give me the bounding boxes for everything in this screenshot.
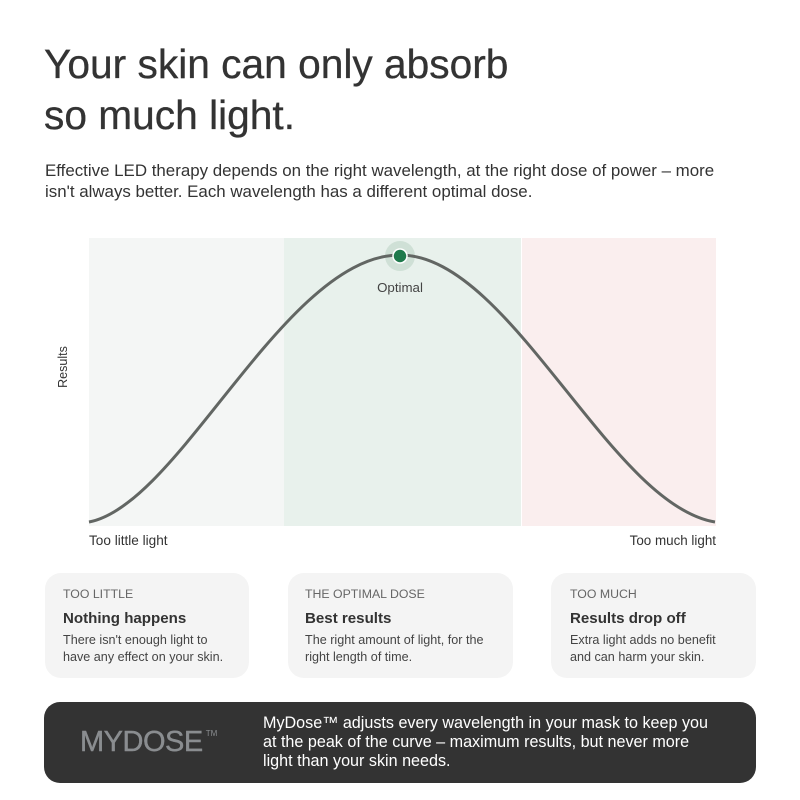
- mydose logo: MYDOSE TM: [80, 726, 217, 758]
- card: too little: There isn't enough light to: [63, 633, 208, 647]
- card: too little: Nothing happens: [63, 610, 186, 627]
- card: the optimal dose: THE OPTIMAL DOSE: [305, 587, 425, 601]
- title: [44, 41, 508, 138]
- mydose banner: [44, 702, 756, 783]
- card: the optimal dose: Best results: [305, 610, 391, 627]
- zone: too little light: [89, 238, 284, 526]
- title: Your skin can only absorb: [44, 41, 508, 87]
- curve: [89, 255, 715, 522]
- mydose description: MyDose™ adjusts every wavelength in your mask to keep you: [263, 714, 708, 732]
- title: so much light.: [44, 92, 295, 138]
- bell curve chart: [56, 238, 716, 548]
- card: too little: have any effect on your skin.: [63, 650, 223, 664]
- card: too little: TOO LITTLE: [63, 587, 133, 601]
- card: too much: TOO MUCH: [570, 587, 637, 601]
- x axis label right: Too much light: [630, 533, 716, 548]
- y axis label: Results: [56, 346, 70, 388]
- zone: too much light: [522, 238, 716, 526]
- card: the optimal dose: The right amount of light, for the: [305, 633, 484, 647]
- mydose description: [263, 714, 708, 770]
- optimal label: Optimal: [377, 280, 423, 295]
- card: too much: Results drop off: [570, 610, 686, 627]
- mydose description: light than your skin needs.: [263, 752, 451, 770]
- optimal marker: [393, 249, 407, 263]
- card: too much: and can harm your skin.: [570, 650, 704, 664]
- card: too much: Extra light adds no benefit: [570, 633, 716, 647]
- intro text: Effective LED therapy depends on the right wavelength, at the right dose of power – more: [45, 161, 714, 180]
- intro text: isn't always better. Each wavelength has a different optimal dose.: [45, 182, 532, 201]
- marker halo: [385, 241, 415, 271]
- zone: optimal dose: [284, 238, 521, 526]
- intro text: [45, 161, 714, 201]
- card: the optimal dose: [288, 573, 513, 678]
- card: too much: [551, 573, 756, 678]
- mydose description: at the peak of the curve – maximum results, but never more: [263, 733, 689, 751]
- card: too little: [45, 573, 249, 678]
- card: the optimal dose: right length of time.: [305, 650, 412, 664]
- x axis label left: Too little light: [89, 533, 168, 548]
